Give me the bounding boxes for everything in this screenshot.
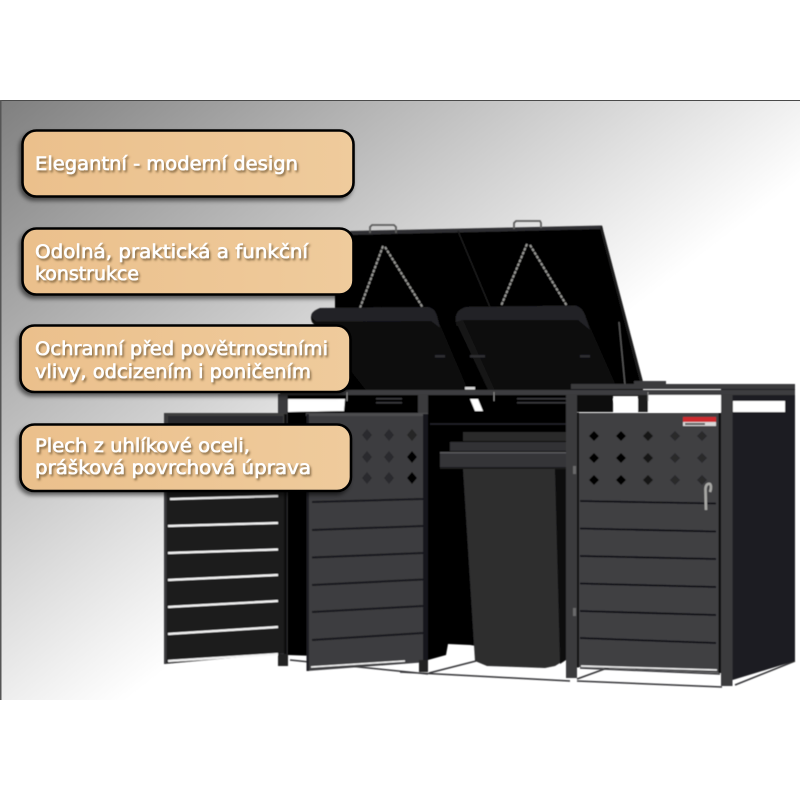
right bin lid [456,306,620,395]
interior dark shell [287,395,566,660]
middle door [306,413,428,672]
bins in the middle bay [440,432,566,668]
locks on rail [347,392,648,401]
open roof lid [335,221,643,396]
callout text 3: Ochranní před povětrnostními [35,339,328,360]
callout: elegant design [22,130,354,196]
callout text 1: Elegantní - moderní design [35,154,298,175]
callout: durable construction [22,228,354,294]
right door [573,412,721,673]
brand label [683,417,716,426]
left door [164,413,288,666]
callout text 2: Odolná, praktická a funkční [35,242,309,263]
floor frame lines [290,660,795,687]
background gradient panel [0,100,800,700]
callout text 4: Plech z uhlíkové oceli, [35,436,250,457]
right side panel [732,412,795,680]
product: waste bin enclosure [164,221,795,687]
callout: carbon steel [20,424,351,491]
door handle [706,484,711,510]
callout text 4: prášková povrchová úprava [35,458,311,479]
callout text 3: vlivy, odcizením i poničením [35,362,311,383]
top frame rail and gaps [280,381,795,425]
frame posts [278,394,732,686]
callout text 2: konstrukce [35,264,139,285]
lid chains [360,244,567,308]
left bin lid [311,307,470,395]
callout: protection [20,326,350,392]
